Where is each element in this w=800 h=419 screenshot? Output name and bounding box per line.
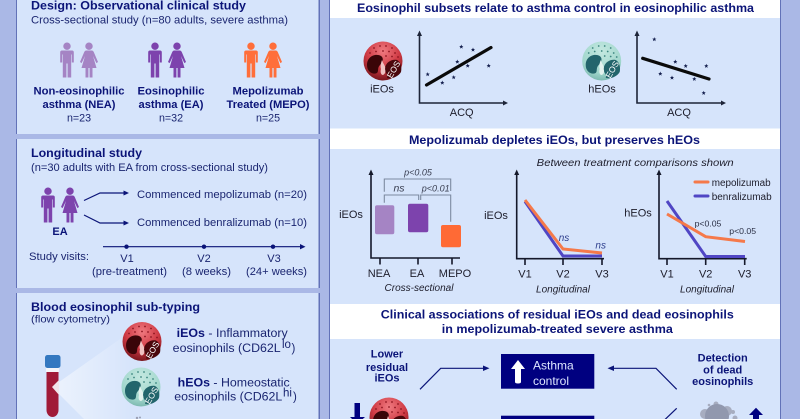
line chart: hEOs longitudinal: V2 [699, 268, 712, 280]
iEOs description: eosinophils (CD62L [173, 343, 281, 355]
lower residual iEOs label: residual [366, 362, 408, 374]
panel frame: right column [329, 0, 781, 419]
line chart: hEOs longitudinal: V3 [738, 268, 751, 280]
axis label: ACQ [667, 107, 691, 119]
mepolizumab arm: Commenced mepolizumab (n=20) [137, 189, 307, 201]
detection of dead eosinophils label: eosinophils [692, 376, 753, 388]
icon: hEOs cell: EOS [143, 385, 160, 406]
asthma control box [501, 354, 594, 389]
iEOs caption: iEOs [370, 84, 394, 96]
arrow: to mepolizumab [84, 190, 129, 200]
comparisons note: Between treatment comparisons shown [537, 157, 734, 169]
section title: Eosinophil subsets relate to asthma control in eosinophilic asthma [357, 1, 754, 15]
lower residual iEOs label [366, 349, 408, 385]
visit timeline [103, 244, 306, 249]
icon: NEA people [60, 42, 98, 78]
bar chart: cross-sectional: p<0.05 [403, 168, 433, 178]
line chart: iEOs longitudinal [484, 170, 609, 296]
MEPO label: n=25 [256, 112, 280, 124]
bar chart: cross-sectional [339, 168, 472, 294]
visit labels: (24+ weeks) [246, 266, 307, 278]
line chart: iEOs longitudinal: ns [595, 240, 606, 252]
detection of dead eosinophils label [692, 353, 753, 388]
EA caption: EA [52, 226, 68, 238]
bar chart: cross-sectional: p<0.01 [421, 184, 450, 194]
icon: hEOs cell: EOS [603, 59, 621, 80]
legend: benralizumab [712, 192, 772, 203]
longitudinal subheading: (n=30 adults with EA from cross-sectional study) [31, 162, 268, 174]
MEPO label: Treated (MEPO) [226, 99, 310, 111]
hEOs description: hi [283, 388, 292, 400]
line chart: hEOs longitudinal: p<0.05 [695, 219, 722, 229]
line chart: iEOs longitudinal: V1 [518, 268, 532, 280]
bar chart: cross-sectional: MEPO [439, 268, 472, 280]
longitudinal heading: Longitudinal study [31, 146, 142, 160]
section title: Mepolizumab depletes iEOs, but preserves hEOs [409, 133, 700, 147]
bar chart: cross-sectional: Cross-sectional [385, 283, 454, 294]
panel: longitudinal study [16, 139, 320, 288]
line chart: hEOs longitudinal [624, 170, 756, 296]
panel: design [16, 0, 320, 134]
visit labels: (pre-treatment) [92, 266, 167, 278]
legend: mepolizumab [712, 178, 771, 189]
EA label: Eosinophilic [138, 86, 204, 98]
lower residual iEOs label: Lower [371, 349, 404, 361]
line chart: hEOs longitudinal: Longitudinal [680, 284, 735, 296]
line chart: hEOs longitudinal: p<0.05 [729, 226, 756, 236]
icon: EA people [148, 42, 186, 78]
iEOs description [173, 328, 296, 355]
light beam from tube [52, 332, 130, 419]
sub-typing subheading: (flow cytometry) [31, 314, 110, 326]
icon: hEOs cell [582, 42, 621, 80]
design subheading: Cross-sectional study (n=80 adults, severe asthma) [31, 14, 288, 26]
arrow: to benralizumab [84, 215, 129, 226]
visit labels: V1 [120, 253, 134, 265]
second outcome box [501, 416, 594, 419]
hEOs caption: hEOs [588, 84, 616, 96]
arrow: dead eosinophils to second outcome [665, 408, 677, 419]
asthma control box: control [533, 374, 569, 388]
section title: Clinical associations of residual iEOs and dead eosinophils [381, 307, 734, 321]
study visits label: Study visits: [29, 251, 89, 263]
visit labels: (8 weeks) [182, 266, 231, 278]
iEOs description: ) [292, 343, 296, 355]
icon: up arrow [749, 408, 763, 419]
visit labels: V2 [197, 253, 211, 265]
icon: up arrow [511, 360, 525, 384]
detection of dead eosinophils label: of dead [703, 364, 742, 376]
NEA label: n=23 [67, 112, 91, 124]
visit labels [92, 253, 307, 278]
scatter chart: hEOs vs ACQ [634, 30, 726, 106]
section: clinical associations [330, 304, 780, 419]
detection of dead eosinophils label: Detection [698, 353, 748, 365]
legend [695, 178, 772, 203]
hEOs description: eosinophils (CD62L [174, 392, 283, 404]
icon: EA people [41, 188, 79, 222]
section title [381, 307, 734, 336]
icon: MEPO people [244, 42, 282, 78]
section: depletion [330, 128, 780, 296]
line chart: iEOs longitudinal: V2 [556, 268, 570, 280]
hEOs description [174, 378, 297, 404]
NEA label [34, 86, 124, 124]
bar chart: cross-sectional: NEA [368, 268, 391, 280]
NEA label: asthma (NEA) [42, 99, 116, 111]
visit labels: V3 [267, 253, 281, 265]
sub-typing heading: Blood eosinophil sub-typing [31, 300, 200, 314]
arrow: dead eosinophils to asthma control [608, 366, 677, 389]
icon: iEOs cell [370, 398, 408, 419]
iEOs description: iEOs - Inflammatory [177, 328, 288, 340]
icon: blood tube [45, 355, 60, 417]
lower residual iEOs label: iEOs [374, 373, 400, 385]
section title: in mepolizumab-treated severe asthma [442, 322, 673, 336]
panel: blood sub-typing [16, 293, 320, 419]
line chart: iEOs longitudinal: V3 [595, 268, 609, 280]
line chart: iEOs longitudinal: Longitudinal [536, 284, 591, 296]
EA label: n=32 [159, 112, 183, 124]
hEOs description: hEOs - Homeostatic [178, 378, 290, 390]
icon: down arrow [350, 403, 365, 419]
box text: Asthma [533, 359, 574, 373]
icon: iEOs cell [364, 42, 402, 80]
icon: dead eosinophil cut off [136, 416, 141, 419]
icon: iEOs cell: EOS [144, 339, 161, 360]
bar chart: cross-sectional: ns [393, 183, 405, 195]
line chart: iEOs longitudinal: ns [559, 233, 569, 244]
MEPO label [226, 86, 310, 124]
MEPO label: Mepolizumab [232, 86, 304, 98]
line chart: hEOs longitudinal: V1 [660, 268, 674, 280]
section: asthma control [330, 0, 780, 119]
axis label: ACQ [450, 107, 474, 119]
scatter chart: iEOs vs ACQ [417, 30, 508, 106]
hEOs description: ) [293, 392, 297, 404]
bar chart: cross-sectional: iEOs [339, 209, 363, 221]
icon: dead eosinophil [700, 402, 738, 419]
benralizumab arm: Commenced benralizumab (n=10) [137, 217, 307, 229]
iEOs description: lo [282, 339, 291, 351]
icon: iEOs cell: EOS [385, 59, 402, 80]
bar chart: cross-sectional: EA [410, 268, 425, 280]
arrow: iEOs to asthma control [420, 366, 490, 389]
line chart: iEOs longitudinal: iEOs [484, 210, 508, 222]
EA label: asthma (EA) [138, 99, 204, 111]
line chart: hEOs longitudinal: hEOs [624, 208, 652, 220]
NEA label: Non-eosinophilic [34, 86, 124, 98]
icon: iEOs cell [122, 322, 162, 361]
icon: hEOs cell [122, 368, 160, 406]
EA label [138, 86, 204, 124]
